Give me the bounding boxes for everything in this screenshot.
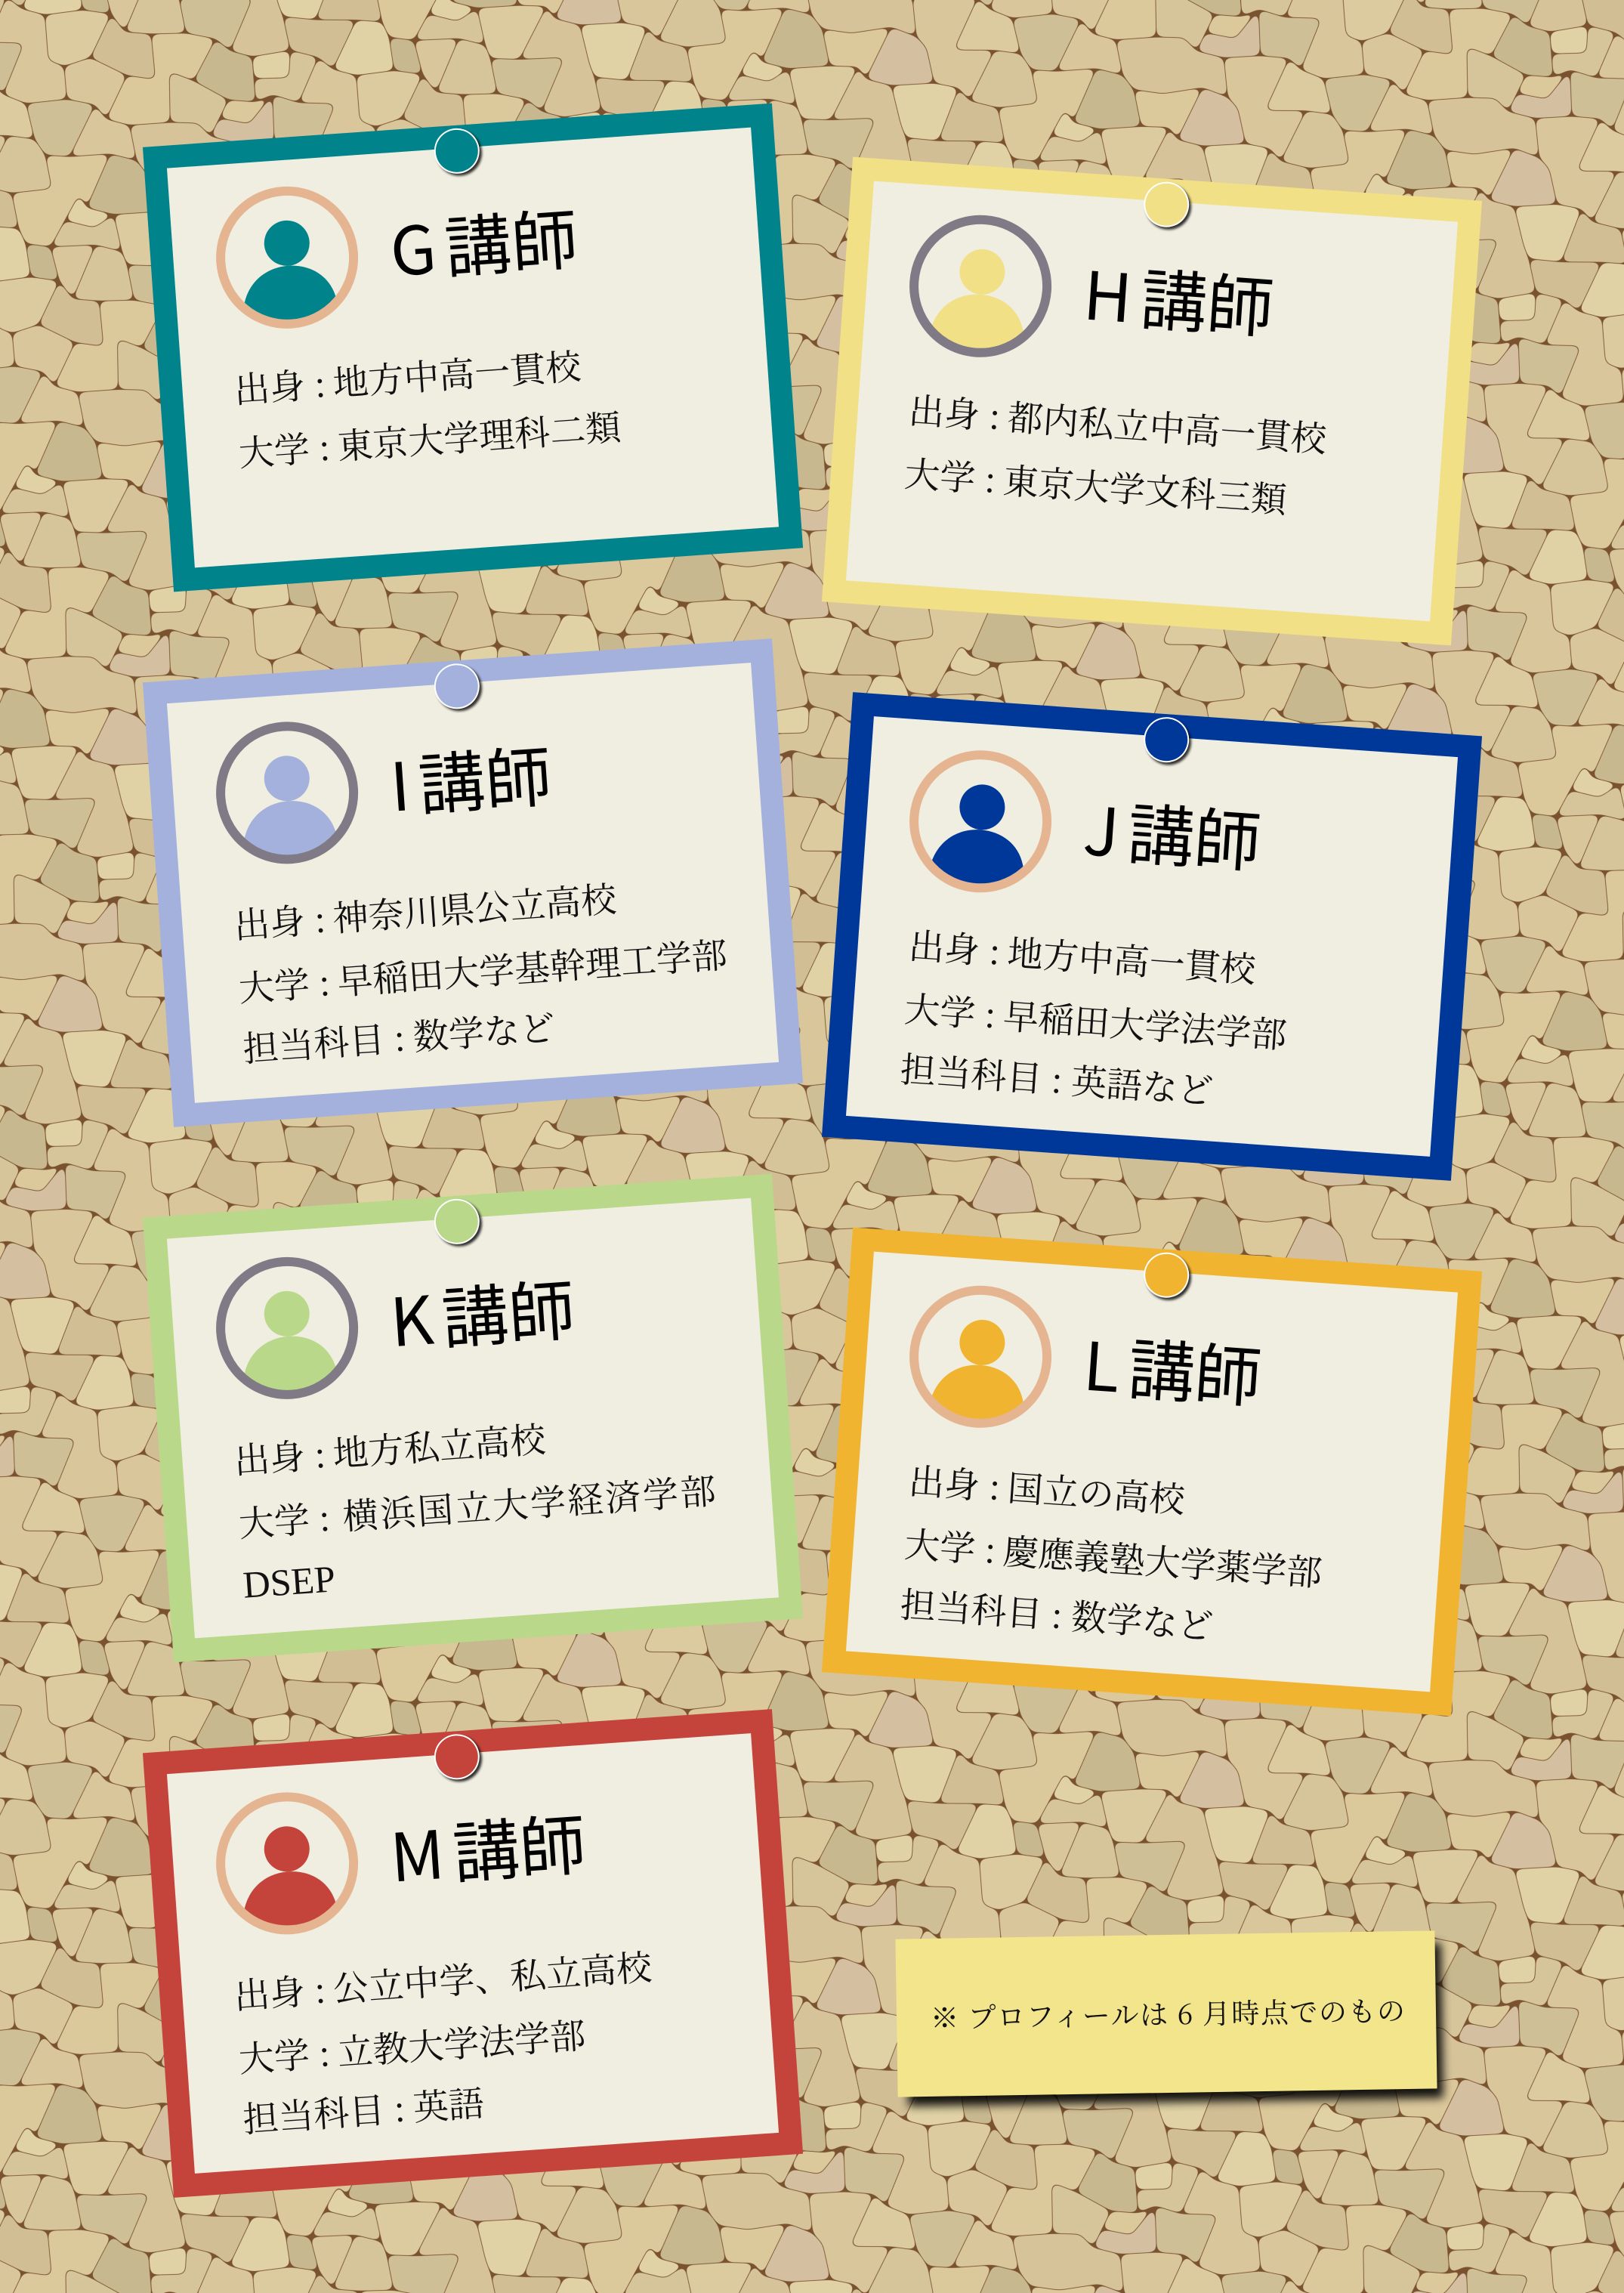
text: profile: 東京大学理科二類 (335, 400, 623, 470)
text: profile: 横浜国立大学経済学部 (341, 1463, 718, 1540)
panel: J teacher card (834, 696, 1471, 1169)
text: profile: 出身 : (233, 892, 327, 949)
icon: pin (433, 127, 483, 178)
text: profile: 担当科目 : (899, 1042, 1064, 1104)
card frame (834, 704, 1470, 1169)
text: profile: 数学など (1070, 1589, 1215, 1649)
note text: ※ プロフィールは 6 月時点でのもの (931, 1989, 1405, 2036)
card frame (155, 1186, 791, 1650)
text: profile: 大学 : (903, 981, 998, 1038)
text: profile: 公立中学、私立高校 (331, 1939, 654, 2012)
text: profile: 地方中高一貫校 (1006, 925, 1258, 993)
card frame (155, 651, 791, 1115)
heading: J 講師 (1081, 778, 1264, 886)
panel: H teacher card (834, 161, 1471, 633)
text: profile: 出身 : (233, 1962, 327, 2020)
icon: pin (1142, 715, 1193, 766)
text: profile (899, 918, 1293, 1119)
text: profile (233, 1939, 662, 2143)
icon: avatar (216, 722, 358, 864)
text: profile: 出身 : (907, 383, 1002, 440)
panel: K teacher card (154, 1178, 791, 1650)
icon: avatar (909, 750, 1051, 892)
panel: G teacher card (154, 107, 791, 579)
text: profile: 立教大学法学部 (335, 2007, 587, 2075)
callout: sticky note (895, 1930, 1443, 2106)
text: profile: 東京大学文科三類 (1002, 453, 1289, 524)
text: profile: 大学 : (236, 1491, 332, 1547)
icon: avatar (216, 187, 358, 329)
text: profile (233, 1400, 721, 1606)
text: profile: 英語など (1070, 1054, 1215, 1114)
text: profile (233, 336, 623, 477)
text: profile (903, 383, 1329, 526)
text: profile: 大学 : (236, 420, 332, 477)
panel: I teacher card (154, 642, 791, 1115)
icon: pin (433, 1197, 483, 1248)
heading: I 講師 (387, 724, 554, 831)
icon: pin (1142, 181, 1193, 231)
icon: pin (433, 1732, 483, 1783)
text: profile: 担当科目 : (899, 1577, 1064, 1639)
text: profile: 慶應義塾大学薬学部 (1002, 1524, 1324, 1596)
text: profile: 出身 : (233, 357, 327, 413)
text: profile: 出身 : (907, 918, 1002, 975)
text: profile: 出身 : (907, 1454, 1002, 1510)
icon: avatar (909, 215, 1051, 357)
text: profile: 地方私立高校 (331, 1411, 548, 1477)
panel: L teacher card (834, 1231, 1471, 1704)
card frame (834, 1240, 1470, 1704)
card frame (155, 1721, 791, 2186)
text: profile: DSEP (242, 1557, 337, 1606)
text: profile: 出身 : (233, 1427, 327, 1484)
text: profile (233, 864, 733, 1072)
icon: pin (433, 662, 483, 712)
text: profile: 地方中高一貫校 (331, 338, 583, 406)
note paper (895, 1930, 1437, 2097)
heading: G 講師 (387, 187, 581, 295)
text: profile: 大学 : (903, 446, 998, 503)
text: profile: 大学 : (236, 2026, 332, 2082)
heading: K 講師 (387, 1257, 578, 1366)
panel: M teacher card (154, 1713, 791, 2186)
heading: L 講師 (1081, 1314, 1264, 1422)
icon: pin (1142, 1251, 1193, 1302)
card frame (155, 116, 791, 579)
text: profile: 早稲田大学法学部 (1002, 988, 1289, 1058)
icon: avatar (909, 1286, 1051, 1428)
heading: H 講師 (1081, 243, 1277, 352)
text: profile: 大学 : (236, 955, 332, 1012)
text: profile: 担当科目 : (241, 1010, 407, 1072)
icon: avatar (216, 1257, 358, 1399)
note shadow (906, 1943, 1443, 2106)
icon: avatar (216, 1792, 358, 1934)
text: profile: 大学 : (903, 1516, 998, 1574)
card frame (834, 169, 1470, 633)
text: profile: 担当科目 : (241, 2081, 407, 2143)
text: profile: 神奈川県公立高校 (331, 871, 619, 941)
text: profile: 英語 (412, 2075, 486, 2131)
heading: M 講師 (387, 1792, 588, 1902)
text: profile: 早稲田大学基幹理工学部 (335, 927, 729, 1005)
text: profile: 都内私立中高一貫校 (1006, 390, 1329, 462)
text: profile (899, 1454, 1329, 1657)
text: profile: 国立の高校 (1006, 1460, 1187, 1523)
text: profile: 数学など (412, 1000, 557, 1060)
